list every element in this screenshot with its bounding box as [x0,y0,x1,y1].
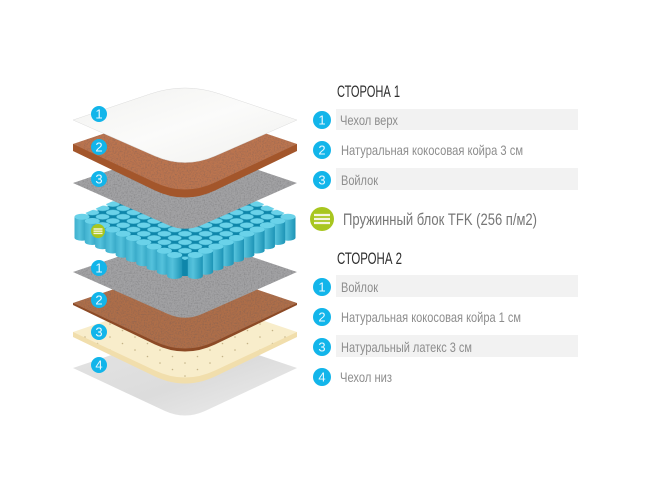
marker 2, side 1 [91,139,107,155]
legend row: felt [313,275,578,297]
heading: side 2: СТОРОНА 2 [337,249,402,268]
legend row: top cover [313,109,578,130]
layer: pocket spring block [74,170,296,279]
marker 1, side 2 [91,260,107,276]
legend row: top cover: Чехол верх [340,112,398,128]
legend row: felt: 3 [318,172,326,188]
legend row: coir 1 cm: Натуральная кокосовая койра 1 см [341,309,521,325]
heading: side 1: СТОРОНА 1 [337,82,400,101]
layer: top cover [73,88,297,162]
legend row: felt: 1 [318,280,326,294]
marker 1, side 2: 1 [95,260,103,276]
layer: latex [73,300,297,384]
marker 2, side 1: 2 [95,140,103,154]
legend row: latex [313,335,578,357]
legend row: coir 3 cm [313,141,523,159]
layer: bottom cover [73,336,297,416]
legend row: felt: Войлок [341,279,379,295]
legend row: top cover: 1 [318,112,326,128]
spring block label: Пружинный блок TFK (256 п/м2) [343,210,537,229]
layer: lower coconut coir [73,271,297,352]
legend row: coir 3 cm: Натуральная кокосовая койра 3 см [341,142,523,158]
marker: spring block [91,224,105,238]
spring block label [310,207,537,231]
layer: upper coconut coir [73,112,297,198]
layer: lower felt [73,240,297,318]
legend row: felt: Войлок [341,172,379,188]
marker 2, side 2 [91,292,107,308]
legend row: coir 1 cm [313,308,521,326]
marker 4, side 2 [91,357,107,373]
legend row: bottom cover [313,368,392,386]
legend row: latex: Натуральный латекс 3 см [341,339,472,355]
marker 4, side 2: 4 [95,358,103,372]
legend row: felt [313,168,578,190]
marker 3, side 2: 3 [95,324,103,340]
marker 1, side 1: 1 [95,106,103,122]
marker 2, side 2: 2 [95,292,103,308]
legend row: latex: 3 [318,340,326,354]
legend row: coir 3 cm: 2 [318,142,326,158]
marker 3, side 2 [91,324,107,340]
marker 1, side 1 [91,106,107,122]
marker 3, side 1 [91,171,107,187]
legend row: coir 1 cm: 2 [318,310,326,324]
illustration: mattress layers [73,88,297,416]
legend row: bottom cover: Чехол низ [340,369,392,385]
marker 3, side 1: 3 [95,172,103,186]
legend row: bottom cover: 4 [318,370,326,384]
layer: upper felt [73,151,297,229]
